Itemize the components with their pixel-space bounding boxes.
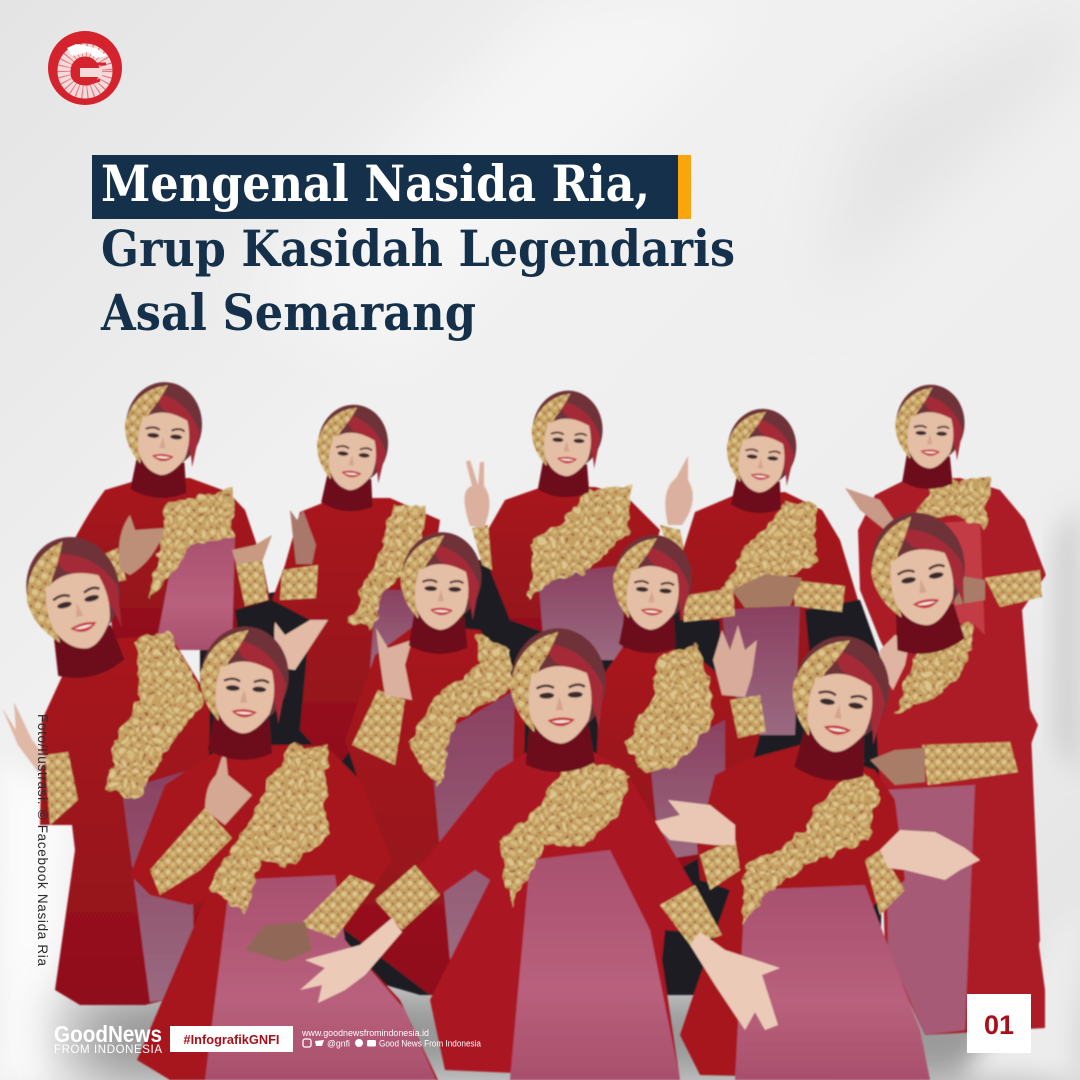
title highlight bar [92,155,678,219]
singer: back row 3 [464,389,693,660]
hand: open left [300,918,402,1003]
contact details: www.goodnewsfromindonesia.id [301,1028,429,1038]
hand: raised finger [665,456,693,525]
contact details [301,1028,481,1048]
singer: front row centre [300,627,780,1080]
singer: back row 5 [845,384,1046,960]
brand wordmark: GoodNews [54,1021,162,1047]
cuff: sleeve lace [922,742,1018,785]
brand wordmark: FROM INDONESIA [54,1044,162,1056]
title line 2: Grup Kasidah Legendaris [101,219,735,278]
singer: back row 2 [272,402,440,770]
singer: middle row far right [862,505,1045,1035]
cuff: left sleeve [375,865,440,930]
page number: 01 [984,1010,1014,1040]
singer: front row right [652,630,980,1080]
singer: back row 1 [74,379,272,650]
title line 3: Asal Semarang [100,283,476,342]
brand wordmark [54,1021,162,1056]
photo: Nasida Ria group [2,379,1046,1080]
singer: middle row right [595,532,766,880]
social icons [303,1039,376,1047]
singer: front row left [130,624,438,1080]
hand: peace sign [464,460,490,528]
cuff: right sleeve [660,885,722,945]
hashtag box: #InfografikGNFI [184,1032,280,1047]
hand: pointing [205,748,252,825]
dark backdrop between singers [200,560,885,995]
title accent [678,155,691,219]
hand: open right [880,830,980,880]
singer: middle row left [2,527,210,1005]
contact details: Good News From Indonesia [379,1038,481,1048]
logo: GNFI red circle [48,31,122,105]
singer: back row 4 [680,406,858,740]
title line 1: Mengenal Nasida Ria, [101,154,650,213]
page number [967,994,1031,1053]
cuff: right sleeve [300,875,375,938]
cuff: left sleeve [150,808,232,895]
contact details: @gnfi [327,1038,350,1048]
photo credit: Foto/Ilustrasi: © Facebook Nasida Ria [35,714,50,966]
hand: gesture [376,628,412,700]
hand: open left [652,800,735,845]
title [92,154,735,342]
hand: open right [690,932,780,1030]
singer: middle row centre [274,531,525,995]
hashtag box [170,1026,293,1052]
